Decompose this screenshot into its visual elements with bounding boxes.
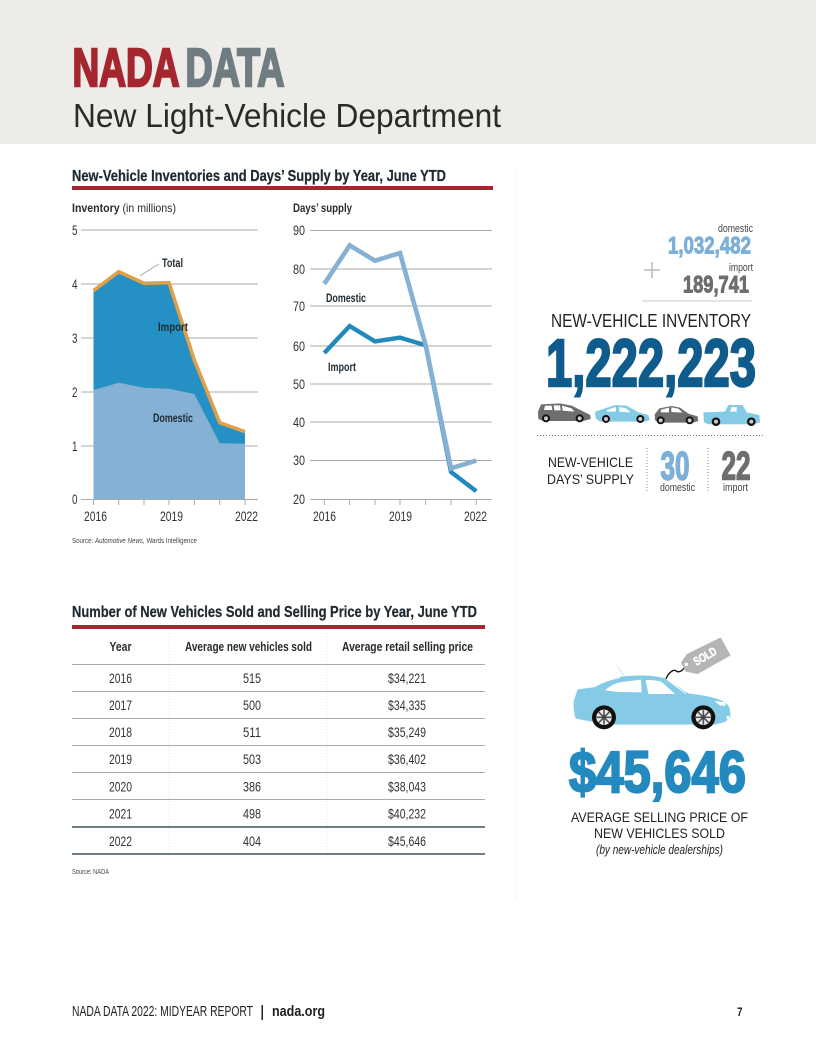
line chart: days' supply (293, 201, 492, 524)
row 2019: 503 (243, 751, 261, 767)
label: total with leader: Total (162, 256, 183, 270)
footer: page number: 7 (737, 1005, 743, 1019)
y axis labels (293, 222, 305, 507)
logo: NADA DATA: DATA (186, 38, 284, 98)
label: domestic: Domestic (153, 411, 193, 425)
row 2016: $34,221 (388, 670, 426, 686)
row 2017: $34,335 (388, 697, 426, 713)
row 2018: $35,249 (388, 724, 426, 740)
x axis labels (313, 508, 487, 524)
row 2016 (109, 670, 426, 686)
caption: average selling price: (by new-vehicle dealerships) (596, 842, 723, 857)
row 2017: 500 (243, 697, 261, 713)
row 2020: 386 (243, 778, 261, 794)
y axis labels: 5 (72, 222, 78, 238)
y axis labels: 1 (72, 438, 78, 454)
x axis labels: 2019 (160, 508, 183, 524)
y axis labels (72, 222, 78, 507)
row 2021: $40,232 (388, 806, 426, 822)
source: inventory: Source: Automotive News, Wards Intelligence (72, 538, 197, 545)
tag string (666, 665, 687, 679)
label: domestic: Domestic (326, 291, 366, 305)
icon: blue sedan (595, 405, 650, 423)
table header: Average new vehicles sold (185, 639, 312, 654)
y axis labels: 30 (293, 452, 305, 468)
row 2017: 2017 (109, 697, 132, 713)
row 2018: 2018 (109, 724, 132, 740)
source: table: Source: NADA (72, 869, 109, 876)
icon: blue pickup (703, 405, 760, 426)
icon: sold car with tag (574, 637, 731, 729)
row 2022: 404 (243, 833, 261, 849)
label: new-vehicle days' supply: NEW-VEHICLE (548, 454, 633, 470)
stat: import inventory: import (729, 262, 753, 274)
icon: gray hatchback (655, 406, 698, 424)
y axis labels: 60 (293, 338, 305, 354)
area chart: inventory in millions (72, 201, 258, 524)
stat: import days' supply: import (723, 482, 748, 494)
label: import: Import (328, 360, 356, 374)
y axis labels: 90 (293, 222, 305, 238)
y axis labels: 2 (72, 384, 78, 400)
row 2021: 498 (243, 806, 261, 822)
x axis labels: 2022 (235, 508, 258, 524)
wheels (592, 705, 715, 729)
stat: average selling price: $45,646 (569, 740, 746, 805)
area: import (94, 272, 245, 444)
row 2022 (109, 833, 426, 849)
section heading: vehicles sold and selling price (72, 604, 485, 629)
y axis labels: 3 (72, 330, 78, 346)
panel: average selling price (569, 637, 748, 857)
stat: import days' supply (722, 444, 750, 494)
stat: domestic inventory: 1,032,482 (668, 232, 751, 260)
header band (0, 0, 816, 144)
stat: domestic inventory (668, 223, 753, 260)
panel: new-vehicle inventory (537, 223, 765, 494)
section heading: inventories and days' supply: New-Vehicle Inventories and Days’ Supply by Year, June YTD (72, 168, 446, 185)
row 2017 (109, 697, 426, 713)
label: new-vehicle days' supply (547, 454, 635, 487)
caption: average selling price: AVERAGE SELLING PRICE OF (571, 810, 748, 825)
table header: Average retail selling price (342, 639, 473, 654)
line: total (94, 272, 245, 432)
sold tag: SOLD (691, 644, 719, 669)
icon: gray wagon (538, 403, 591, 422)
sold tag (681, 637, 731, 674)
x axis labels (84, 508, 258, 524)
x axis labels: 2019 (389, 508, 412, 524)
stat: domestic inventory: domestic (718, 223, 753, 235)
logo: NADA DATA: NADA (72, 38, 180, 98)
row 2019: 2019 (109, 751, 132, 767)
label: import: Import (158, 320, 188, 334)
y axis labels: 80 (293, 261, 305, 277)
label: new-vehicle days' supply: DAYS’ SUPPLY (547, 471, 635, 487)
stat: import days' supply: 22 (722, 444, 750, 488)
footer: website: nada.org (272, 1003, 325, 1020)
stat: domestic days' supply: domestic (660, 482, 695, 494)
x axis labels: 2016 (313, 508, 336, 524)
y axis labels: 50 (293, 376, 305, 392)
label: new-vehicle inventory: NEW-VEHICLE INVENTORY (551, 311, 751, 331)
label: total with leader (140, 256, 183, 276)
row 2019: $36,402 (388, 751, 426, 767)
row 2020: $38,043 (388, 778, 426, 794)
line: import (324, 326, 476, 491)
row 2016: 515 (243, 670, 261, 686)
row 2020: 2020 (109, 778, 132, 794)
car body (574, 676, 731, 725)
icon: plus (644, 262, 660, 278)
page title: New Light-Vehicle Department (73, 97, 501, 134)
stat: import inventory (683, 262, 753, 298)
row 2019 (109, 751, 426, 767)
row 2018 (109, 724, 426, 740)
caption: average selling price: NEW VEHICLES SOLD (594, 826, 725, 841)
chart title: inventory: Inventory (in millions) (72, 201, 176, 215)
row 2018: 511 (243, 724, 261, 740)
stat: domestic days' supply: 30 (660, 444, 690, 488)
row 2021: 2021 (109, 806, 132, 822)
row 2021 (109, 806, 426, 822)
y axis labels: 70 (293, 298, 305, 314)
y axis labels: 0 (72, 491, 78, 507)
line: domestic (324, 245, 476, 468)
row 2020 (109, 778, 426, 794)
x axis labels: 2022 (464, 508, 487, 524)
y axis labels: 4 (72, 276, 78, 292)
stat: import inventory: 189,741 (683, 272, 749, 298)
row 2022: 2022 (109, 833, 132, 849)
icon: row of four cars (538, 403, 760, 426)
footer: report name: NADA DATA 2022: MIDYEAR REPORT (72, 1003, 253, 1020)
y axis labels: 20 (293, 491, 305, 507)
x axis labels: 2016 (84, 508, 107, 524)
row 2022: $45,646 (388, 833, 426, 849)
table header: Year (110, 639, 132, 654)
y axis labels: 40 (293, 414, 305, 430)
caption: average selling price (571, 810, 748, 857)
area: domestic (94, 383, 245, 499)
row 2016: 2016 (109, 670, 132, 686)
table: vehicles sold and price by year (72, 630, 485, 855)
section heading: vehicles sold and selling price: Number of New Vehicles Sold and Selling Price by Year, June YTD (72, 604, 477, 621)
footer (72, 1003, 743, 1020)
table header (110, 639, 473, 654)
chart title: days' supply: Days’ supply (293, 201, 352, 215)
